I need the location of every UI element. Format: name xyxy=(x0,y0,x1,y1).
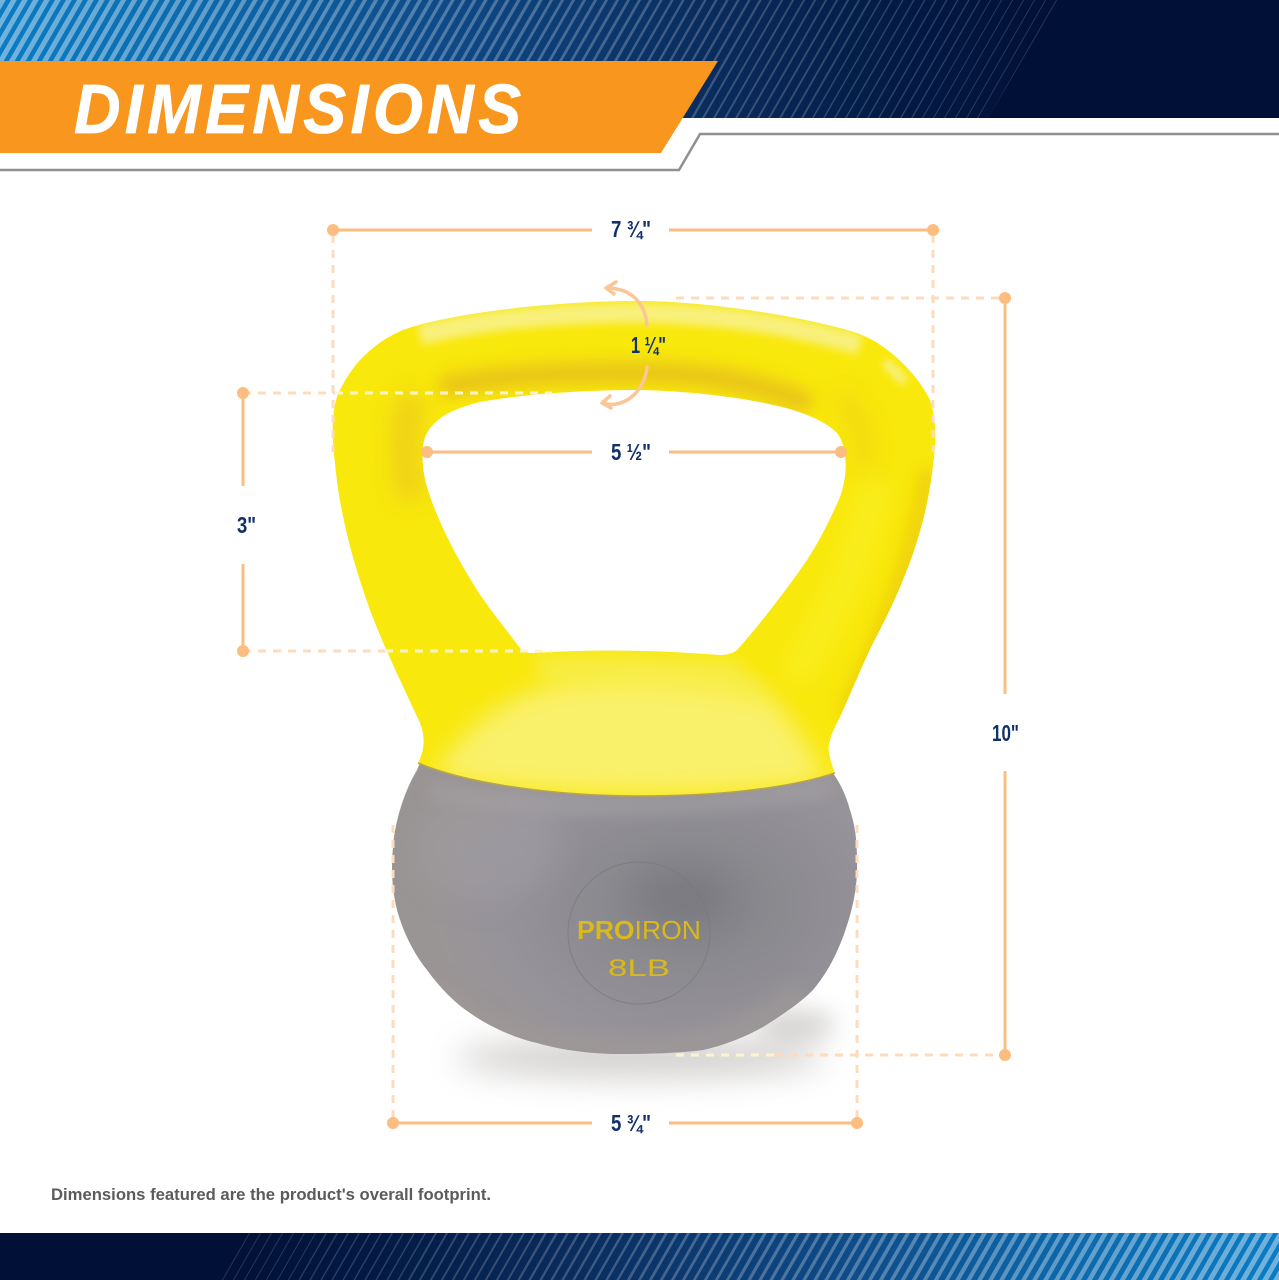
arrow: top curved xyxy=(606,282,647,325)
dimension: handle height 3 xyxy=(237,387,552,657)
dimension: inner width 5 1/2 xyxy=(421,439,847,465)
label 5 1/2: 5 ½" xyxy=(611,439,651,465)
kettlebell logo badge xyxy=(568,862,710,1004)
dimension: grip diameter 1 1/4 xyxy=(602,282,666,408)
header gray rule xyxy=(0,134,1279,170)
title: DIMENSIONS xyxy=(74,71,521,149)
arrow: bottom curved xyxy=(602,367,647,408)
title ribbon xyxy=(0,61,718,153)
dimension: overall height 10 xyxy=(676,292,1019,1061)
kettlebell gray ball xyxy=(392,758,857,1054)
header banner xyxy=(0,0,1279,118)
footer banner xyxy=(0,1233,1279,1280)
label 3: 3" xyxy=(237,512,256,538)
footnote: Dimensions featured are the product's overall footprint. xyxy=(51,1185,491,1204)
label 1 1/4: 1 ¼" xyxy=(631,332,666,358)
brand logo text: PROIRON xyxy=(577,915,701,945)
kettlebell xyxy=(333,301,935,1054)
floor shadow xyxy=(455,1009,835,1078)
label 5 3/4: 5 ¾" xyxy=(611,1110,651,1136)
dimension: overall width 7 3/4 xyxy=(327,216,939,452)
dimension: base width 5 3/4 xyxy=(387,825,863,1136)
label 7 3/4: 7 ¾" xyxy=(611,216,651,242)
kettlebell yellow handle xyxy=(333,301,935,796)
label 10: 10" xyxy=(992,720,1019,746)
weight label: 8LB xyxy=(608,955,670,982)
